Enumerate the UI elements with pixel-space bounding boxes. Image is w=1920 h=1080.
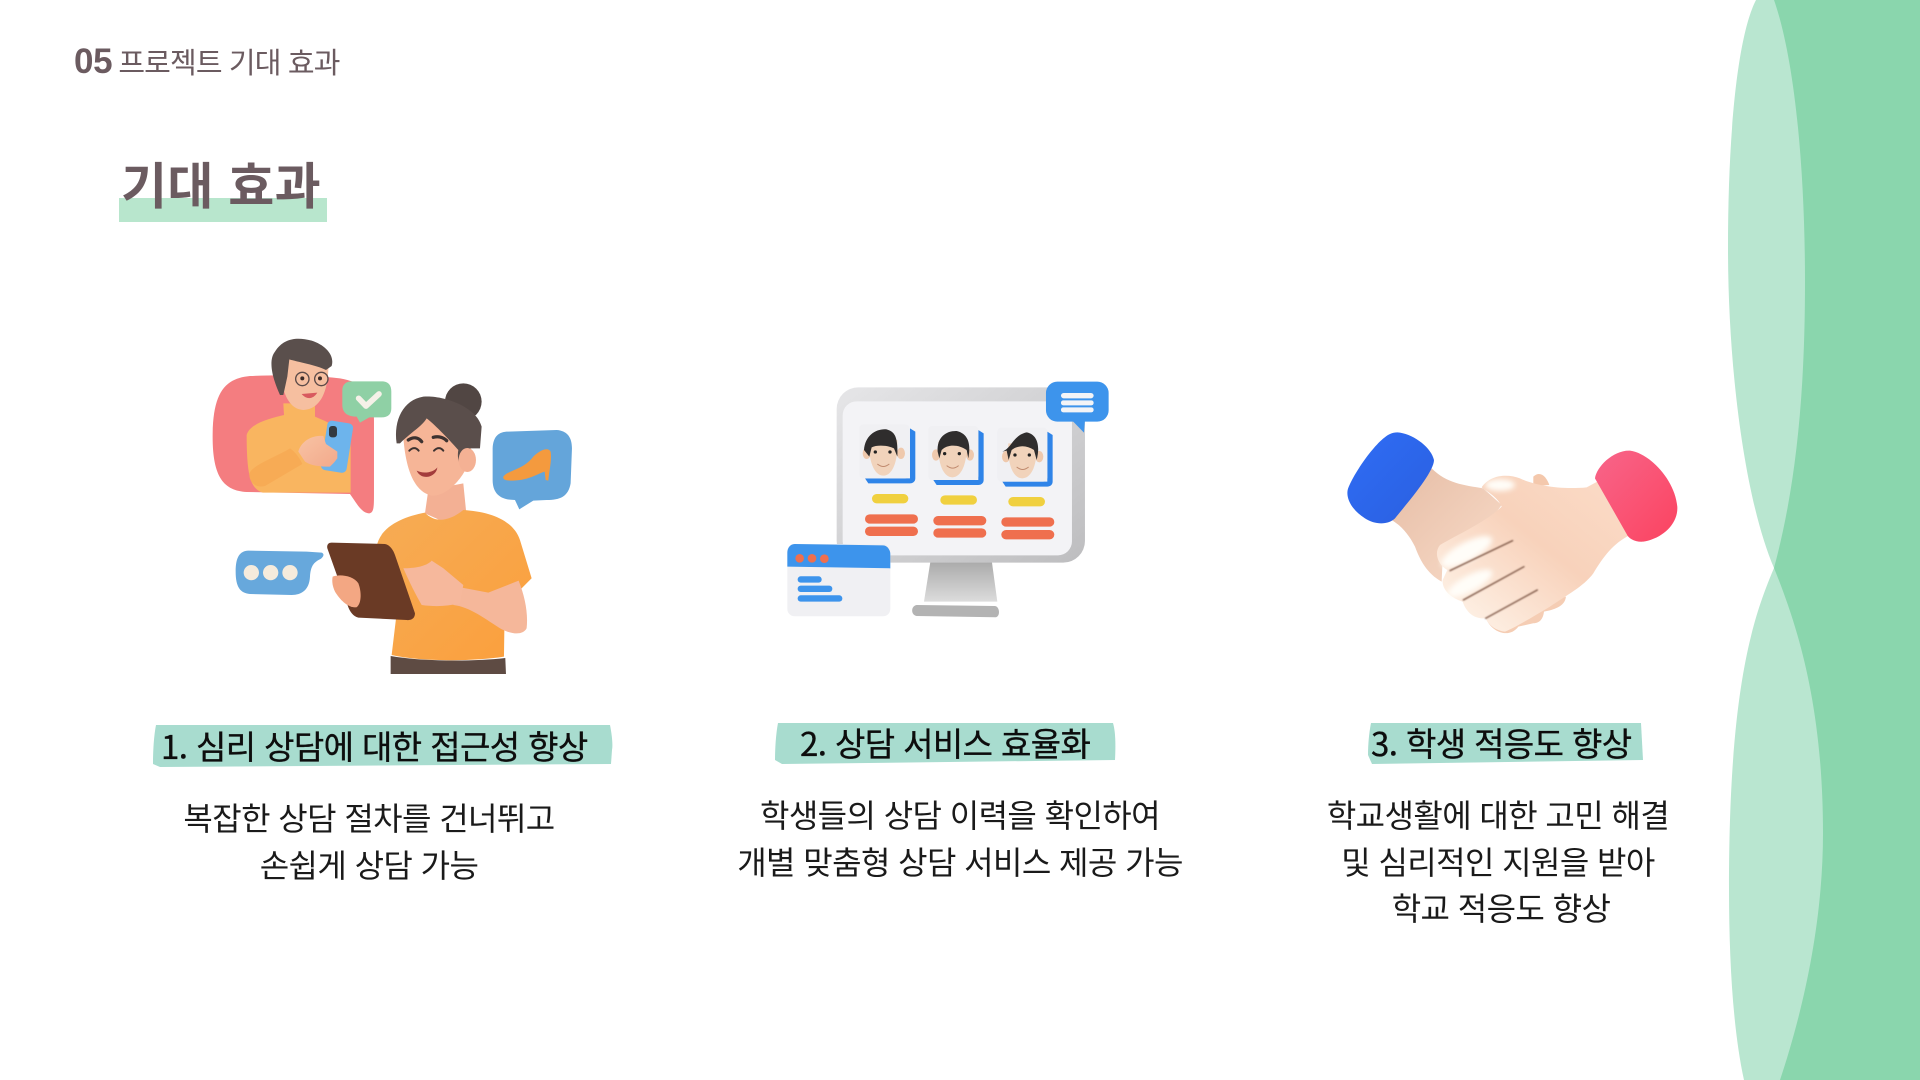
illustration: monitor with student profiles — [787, 382, 1109, 617]
chat bubble — [1046, 382, 1109, 433]
illustration: handshake — [1347, 432, 1677, 633]
finger highlights — [1437, 479, 1515, 602]
woman head — [396, 383, 482, 496]
card 3 body: 및 심리적인 지원을 받아 — [1341, 838, 1655, 884]
man torso — [247, 403, 351, 493]
yellow name bars — [872, 494, 1045, 506]
card 2 body: 개별 맞춤형 상담 서비스 제공 가능 — [737, 838, 1183, 884]
woman neck and shirt — [425, 483, 467, 522]
browser window — [787, 544, 890, 616]
card 2 heading: 2. 상담 서비스 효율화 — [800, 718, 1090, 766]
finger separators — [1450, 541, 1537, 618]
card 1 body: 복잡한 상담 절차를 건너뛰고 — [183, 794, 555, 840]
profile cards — [859, 424, 1053, 487]
blue cuff — [1347, 432, 1434, 523]
monitor stand — [924, 560, 997, 602]
phone — [320, 420, 354, 473]
right hand — [1437, 476, 1630, 632]
left forearm and hand — [1392, 468, 1502, 582]
man sleeve cuff — [249, 448, 302, 487]
orange detail bars — [865, 514, 1054, 539]
card 3 heading: 3. 학생 적응도 향상 — [1371, 718, 1632, 766]
woman pants — [391, 656, 506, 674]
red speech bubble — [213, 375, 374, 513]
card 1 heading: 1. 심리 상담에 대한 접근성 향상 — [161, 721, 588, 769]
monitor frame — [837, 387, 1085, 563]
card 1 body: 손쉽게 상담 가능 — [260, 841, 478, 887]
section header: 05프로젝트 기대 효과 — [74, 40, 340, 82]
card 3 body: 학교생활에 대한 고민 해결 — [1327, 791, 1669, 837]
phone camera — [329, 426, 337, 437]
man hand — [298, 436, 337, 467]
woman arm — [453, 581, 527, 633]
card 2 body — [737, 791, 1183, 884]
woman hands — [332, 575, 361, 607]
tablet — [327, 543, 415, 620]
card 1 body — [183, 794, 555, 887]
card 2 body: 학생들의 상담 이력을 확인하여 — [760, 791, 1160, 837]
check bubble — [342, 381, 391, 423]
card 3 body — [1327, 791, 1669, 930]
red cuff — [1595, 451, 1677, 542]
monitor screen — [843, 401, 1072, 555]
faces — [863, 429, 1043, 478]
dots bubble — [236, 551, 323, 595]
back fingers — [1533, 474, 1549, 486]
blue shoe bubble — [493, 430, 572, 509]
man head — [271, 339, 332, 410]
card 3 body: 학교 적응도 향상 — [1392, 884, 1610, 930]
title highlight bar — [119, 198, 327, 222]
title: 기대 효과 — [121, 147, 321, 219]
